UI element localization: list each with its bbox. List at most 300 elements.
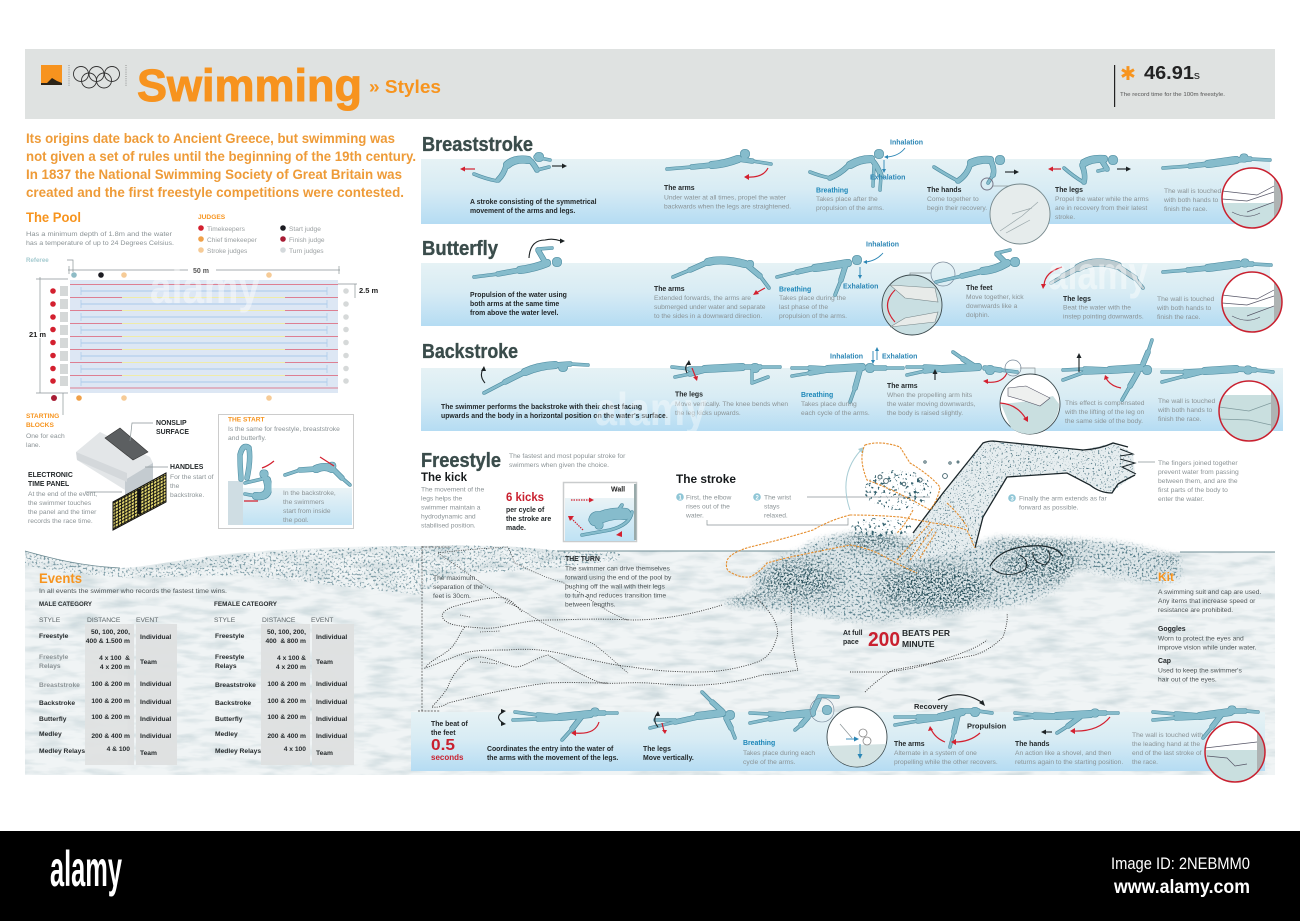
step: breathing: Breathing <box>816 188 848 194</box>
callout: 200 beats per minute: 200 <box>868 629 900 651</box>
text: the turn: pushing off the wall with their legs <box>565 584 666 590</box>
table: female category: EVENT <box>311 617 333 624</box>
table: female category: 400 & 800 m <box>265 638 306 645</box>
text: the turn: THE TURN <box>565 556 600 563</box>
table: female category: 50, 100, 200, <box>267 629 306 636</box>
table: female category: 100 & 200 m <box>267 681 306 688</box>
callout: 200 beats per minute <box>843 628 950 651</box>
label: handles: the <box>170 483 180 490</box>
strip background <box>421 263 1270 326</box>
arrows: overview <box>460 164 567 172</box>
step: breathing: cycle of the arms. <box>743 759 796 766</box>
inset: hand touching wall <box>1222 272 1282 333</box>
step: the legs: The legs <box>1055 187 1083 194</box>
step: breathing: Exhalation <box>882 354 917 360</box>
table: male category: 100 & 200 m <box>91 714 130 721</box>
step: the legs: stroke. <box>1055 214 1075 221</box>
table: male category: 100 & 200 m <box>91 681 130 688</box>
legend: judges: Start judge <box>289 226 321 233</box>
step: the arms: Under water at all times, propel the water <box>664 194 786 202</box>
step: the arms: submerged under water and separate <box>654 304 766 311</box>
step 1 text <box>676 493 732 520</box>
step: the arms: backwards when the legs are straightened. <box>664 203 791 210</box>
text: freestyle intro: The fastest and most popular stroke for <box>509 453 625 460</box>
text: pool description: Has a minimum depth of 1.8m and the water <box>26 231 173 238</box>
text: backstroke start: the swimmers <box>283 499 325 506</box>
table: male category: Freestyle <box>39 633 69 640</box>
step: breathing <box>743 696 838 766</box>
text: starting blocks <box>26 413 65 449</box>
step 2 text: relaxed. <box>764 512 788 520</box>
panel: kit: resistance are prohibited. <box>1158 607 1233 614</box>
text: backstroke start: In the backstroke, <box>283 490 336 497</box>
table: female category: Individual <box>316 733 347 740</box>
text: the kick: hydrodynamic and <box>421 514 476 520</box>
arm <box>910 438 1140 563</box>
text: backstroke start: the pool. <box>283 517 309 524</box>
inset: freestyle finish <box>1205 722 1265 783</box>
text: events intro: In all events the swimmer who records the fastest time wins. <box>39 588 227 595</box>
step: finish: The wall is touched <box>1164 188 1221 195</box>
table: male category: Individual <box>140 716 171 723</box>
step: breathing: Takes place after the <box>816 196 878 203</box>
text: starting blocks: One for each <box>26 433 65 440</box>
step: finish <box>1132 706 1258 766</box>
table: female category: Individual <box>316 634 347 641</box>
step: the legs <box>1048 156 1149 221</box>
step: the hands: begin their recovery. <box>927 205 987 212</box>
diagram: wall turn: Wall <box>611 486 625 494</box>
step: the arms: to the sides in a downward direction. <box>654 313 762 320</box>
text: breaststroke intro: movement of the arms and legs. <box>470 208 575 215</box>
table: male category: MALE CATEGORY <box>39 601 93 608</box>
legend: judges: Finish judge <box>289 237 325 244</box>
step leader lines <box>707 497 930 525</box>
table: female category: FEMALE CATEGORY <box>214 601 278 608</box>
table: male category: Team <box>140 750 157 757</box>
step: finish: with both hands to <box>1163 197 1219 204</box>
step: the hands <box>1015 709 1123 766</box>
step: breathing: Takes place during the <box>779 295 846 302</box>
step: finish: with both hands to <box>1156 305 1212 312</box>
table: male category: Breaststroke <box>39 682 80 689</box>
table: female category: 4 x 200 m <box>276 664 306 671</box>
table: male category: 400 & 1.500 m <box>86 638 130 645</box>
text: the turn: The swimmer can drive themselves <box>565 566 670 572</box>
step: breathing: Breathing <box>779 286 811 294</box>
panel: the pool <box>26 210 379 530</box>
table: male category: Freestyle <box>39 654 69 661</box>
step: the feet: Move together, kick <box>966 294 1024 301</box>
panel: kit: hair out of the eyes. <box>1158 676 1217 684</box>
step: coordination <box>487 708 618 762</box>
table: female category: 100 & 200 m <box>267 698 306 705</box>
pool diagram <box>29 266 379 415</box>
step 1 text: rises out of the <box>686 504 730 510</box>
step: breathing: Inhalation <box>890 140 923 146</box>
step: coordination: Coordinates the entry into the water of <box>487 746 613 753</box>
text: the kick: legs helps the <box>421 496 463 502</box>
label: electronic time panel: records the race time. <box>28 518 93 525</box>
table: female category: STYLE <box>214 617 236 624</box>
table: female category: Individual <box>316 716 347 723</box>
step: breathing: Breathing <box>801 392 833 399</box>
step: leg lift: the same side of the body. <box>1065 418 1143 425</box>
heading: breaststroke: Breaststroke <box>422 134 533 156</box>
label: handles <box>170 464 214 499</box>
callout: 200 beats per minute: At full <box>843 630 863 637</box>
heading: backstroke: Backstroke <box>422 341 518 363</box>
step: breathing: last phase of the <box>779 304 828 311</box>
table: male category: 50, 100, 200, <box>91 629 130 636</box>
table: male category: 200 & 400 m <box>91 733 130 740</box>
step: the arms: the water moving downwards, <box>887 401 976 408</box>
panel: the start <box>218 414 354 528</box>
step: breathing: Takes place during each <box>743 750 815 757</box>
intro paragraph: created and the first freestyle competitions were contested. <box>26 184 404 200</box>
step: the legs: The legs <box>675 392 703 398</box>
text: the turn: forward using the end of the pool by <box>565 574 672 582</box>
text: step 3: forward as possible. <box>1019 504 1079 512</box>
strip background <box>421 368 1283 431</box>
timekeeper dots <box>50 288 56 384</box>
table: male category: Team <box>140 659 157 666</box>
callout: 200 beats per minute: BEATS PER <box>902 628 950 638</box>
text: freestyle intro: swimmers when given the choice. <box>509 462 609 469</box>
step: breathing: propulsion of the arms. <box>816 205 884 212</box>
head <box>990 546 1063 575</box>
website: www.alamy.com <box>1113 877 1250 898</box>
text: pool description <box>26 231 174 247</box>
step: the legs: Move vertically. The knee bends when <box>675 401 788 408</box>
label: handles: backstroke. <box>170 492 204 499</box>
step: breathing <box>810 140 923 212</box>
step: the arms <box>654 260 769 320</box>
watermark <box>150 247 1148 435</box>
step: finish: The wall is touched <box>1158 398 1215 405</box>
label: electronic time panel <box>28 472 97 525</box>
panel: kit: Any items that increase speed or <box>1158 598 1256 605</box>
callout: 6 kicks: 6 kicks <box>506 490 544 504</box>
text: fingers note: first parts of the body to <box>1158 487 1228 494</box>
title: Swimming <box>137 60 362 111</box>
heading: the pool: The Pool <box>26 210 81 225</box>
pool lane blocks <box>60 286 68 386</box>
table: female category: Backstroke <box>215 700 251 707</box>
step 1 text: First, the elbow <box>686 494 731 502</box>
diagram: wall turn <box>564 482 636 542</box>
text: feet separation: separation of the <box>433 584 483 591</box>
table: female category: Team <box>316 750 333 757</box>
legend: judges: Stroke judges <box>207 248 248 255</box>
step: the hands: An action like a shovel, and then <box>1015 750 1111 757</box>
step: finish <box>1156 259 1271 321</box>
strip background <box>421 159 1270 224</box>
step: the legs: Propel the water while the arms <box>1055 196 1149 203</box>
text: step 3 <box>1008 494 1107 512</box>
text: step 3: 3 <box>1010 496 1014 502</box>
step: the legs: The legs <box>643 746 671 753</box>
table: male category: Individual <box>140 699 171 706</box>
step: breathing: Exhalation <box>843 284 878 290</box>
step: finish: the leading hand at the <box>1132 741 1200 748</box>
step: the legs <box>672 360 788 417</box>
callout: beat of the feet: 0.5 <box>431 737 455 754</box>
table: female category: Freestyle <box>215 633 245 640</box>
step: the legs: are in recovery from their latest <box>1055 205 1147 212</box>
table: male category: Medley <box>39 731 62 738</box>
header bar <box>25 49 1275 119</box>
step: breathing: Inhalation <box>830 354 863 360</box>
panel: kit: Kit <box>1158 570 1174 584</box>
table columns background <box>85 624 354 765</box>
heading: the start: THE START <box>228 416 265 424</box>
step: the legs: the leg kicks upwards. <box>675 410 741 417</box>
watermark: alamy <box>595 383 707 435</box>
step: the legs <box>1041 262 1144 320</box>
step: the legs: Beat the water with the <box>1063 304 1131 312</box>
swimmer: breaststroke overview <box>474 152 550 181</box>
other judge dots <box>51 272 272 401</box>
heading: the kick: The kick <box>421 472 468 484</box>
table: male category: Individual <box>140 733 171 740</box>
watermark: alamy <box>1048 247 1148 299</box>
legend: judges: Timekeepers <box>207 226 246 233</box>
label: electronic time panel: At the end of the event, <box>28 491 97 498</box>
callout: beat of the feet: The beat of <box>431 721 468 728</box>
step: the hands: The hands <box>927 187 962 194</box>
table: female category: Individual <box>316 681 347 688</box>
step: the arms: propelling while the other recovers. <box>894 759 998 766</box>
heading: events: Events <box>39 570 82 586</box>
table: male category: Butterfly <box>39 716 67 723</box>
step: the arms: The arms <box>894 741 925 748</box>
text: backstroke intro: The swimmer performs the backstroke with their chest facing <box>441 404 642 411</box>
step: leg lift <box>1063 340 1152 425</box>
dimension: 21 m: 21 m <box>29 330 46 339</box>
table: female category: Relays <box>215 663 237 670</box>
subtitle: » Styles <box>369 77 441 97</box>
step: breathing: Exhalation <box>870 174 905 182</box>
text: step 3: Finally the arm extends as far <box>1019 496 1107 502</box>
legend: judges: JUDGES <box>198 214 226 221</box>
dimension: 2.5 m: 2.5 m <box>359 286 379 295</box>
label: referee: Referee <box>26 257 49 264</box>
arrow: overview <box>481 366 486 383</box>
dimension: 2.5 m <box>338 284 379 298</box>
table: male category: 4 x 100 & <box>99 655 130 662</box>
table: female category: Medley <box>215 731 238 738</box>
step: the arms <box>894 695 1007 766</box>
text: feet separation: feet is 30cm. <box>433 593 471 600</box>
text: the turn <box>565 556 672 608</box>
illustration: freestyle swimmer <box>418 438 1195 711</box>
legend: judges <box>198 214 325 255</box>
step: finish: The wall is touched with <box>1132 732 1203 739</box>
record time callout: 46.91 s <box>1144 63 1201 83</box>
footer bar <box>0 831 1300 921</box>
step: finish: The wall is touched <box>1157 296 1214 303</box>
text: starting blocks: lane. <box>26 442 41 449</box>
turn judge dots <box>343 288 349 384</box>
magnifier: hand entering water <box>1000 360 1060 434</box>
text: feet separation: The maximum <box>433 575 475 582</box>
swimmer: butterfly overview <box>474 248 562 277</box>
intro paragraph: In 1837 the National Swimming Society of Great Britain was <box>26 166 402 182</box>
legend: judges: Turn judges <box>289 248 324 255</box>
magnifier: hands <box>981 178 1050 244</box>
table: male category: Medley Relays <box>39 748 85 755</box>
step: the legs: Move vertically. <box>643 755 694 762</box>
text: pool description: has a temperature of up to 24 Degrees Celsius. <box>26 240 174 247</box>
label: electronic time panel: ELECTRONIC <box>28 472 73 479</box>
step: finish <box>1157 366 1273 423</box>
step: the arms <box>664 150 791 210</box>
step: the legs: instep pointing downwards. <box>1063 314 1144 320</box>
label: electronic time panel: TIME PANEL <box>28 481 69 488</box>
heading: butterfly: Butterfly <box>422 238 499 260</box>
step: the feet: downwards like a <box>966 303 1018 310</box>
text: breaststroke intro: A stroke consisting of the symmetrical <box>470 199 596 206</box>
table: female category: Team <box>316 659 333 666</box>
dotted legs <box>425 547 1007 707</box>
orange stroke path <box>726 443 975 577</box>
text: the kick: swimmer maintain a <box>421 504 481 512</box>
heading: freestyle: Freestyle <box>421 450 501 472</box>
step: finish: finish the race. <box>1164 206 1208 213</box>
panel: breaststroke <box>421 134 1282 244</box>
text: fingers note <box>1138 460 1239 503</box>
magnifier: feet <box>882 262 955 335</box>
callout: 6 kicks: made. <box>506 525 526 532</box>
text: fingers note: prevent water from passing <box>1158 469 1239 476</box>
step: the arms: When the propelling arm hits <box>887 392 972 399</box>
step: the arms: Alternate in a system of one <box>894 750 977 757</box>
step 2 text <box>753 493 791 520</box>
step: finish <box>1163 154 1270 213</box>
step: the legs <box>643 692 735 762</box>
step 1 text: water. <box>685 512 704 520</box>
table: female category: Freestyle <box>215 654 245 661</box>
step: the arms: The arms <box>664 185 695 192</box>
table: male category: DISTANCE <box>87 617 121 624</box>
callout: 6 kicks <box>506 490 551 532</box>
callout: 200 beats per minute: pace <box>843 639 859 646</box>
step: the hands: Come together to <box>927 196 979 203</box>
table: male category: 4 x 200 m <box>100 664 130 671</box>
step: the hands: The hands <box>1015 741 1050 748</box>
panel: freestyle <box>411 438 1265 783</box>
dimension: 50 m: 50 m <box>193 268 209 275</box>
swimmer diving <box>285 462 350 485</box>
callout: 6 kicks: the stroke are <box>506 516 551 523</box>
panel: kit: Goggles <box>1158 626 1186 633</box>
step: the hands: returns again to the starting position. <box>1015 759 1123 766</box>
step: coordination: the arms with the movement of the legs. <box>487 755 618 762</box>
text: fingers note: enter the water. <box>1158 496 1204 503</box>
table: female category: 100 & 200 m <box>267 714 306 721</box>
panel: kit: Cap <box>1158 658 1171 665</box>
step: breathing <box>792 347 917 417</box>
step: the hands <box>927 156 1019 212</box>
step: breathing: Takes place during <box>801 401 857 408</box>
callout: beat of the feet <box>431 721 468 762</box>
step: finish: end of the last stroke of <box>1132 750 1202 757</box>
table: male category: Individual <box>140 681 171 688</box>
callout: 200 beats per minute: MINUTE <box>902 639 935 649</box>
step: breathing: Inhalation <box>866 242 899 248</box>
callout: beat of the feet: the feet <box>431 730 456 737</box>
panel: backstroke <box>421 340 1283 441</box>
table: female category: 4 x 100 <box>284 746 306 753</box>
panel: butterfly <box>421 238 1282 335</box>
text: starting blocks: BLOCKS <box>26 422 54 429</box>
heading: the stroke: The stroke <box>676 474 736 486</box>
table: female category: Butterfly <box>215 716 243 723</box>
panel: kit: A swimming suit and cap are used. <box>1158 589 1261 596</box>
callout: 6 kicks: per cycle of <box>506 507 545 514</box>
step: the feet <box>936 250 1024 319</box>
step: the feet: The feet <box>966 285 993 292</box>
label: handles: HANDLES <box>170 464 204 471</box>
intro paragraph: not given a set of rules until the beginning of the 19th century. <box>26 148 416 164</box>
text: the kick: stabilised position. <box>421 522 476 530</box>
arrow: overview <box>529 238 565 258</box>
text: fingers note: between them, and are the <box>1158 478 1238 485</box>
panel: kit: improve vision while under water. <box>1158 644 1257 652</box>
text: backstroke intro: upwards and the body in a horizontal position on the water's surface. <box>441 413 668 420</box>
table: female category <box>214 601 347 757</box>
swimmer: backstroke overview <box>484 362 588 393</box>
step: finish: the race. <box>1132 759 1158 766</box>
icon: olympic rings <box>69 65 126 88</box>
step: finish: finish the race. <box>1157 314 1201 321</box>
table: male category: 4 & 100 <box>107 746 130 753</box>
text: the kick: The movement of the <box>421 486 484 494</box>
text: butterfly intro: both arms at the same time <box>470 301 559 308</box>
step 1 text: 1 <box>678 496 682 502</box>
step 2 text: 2 <box>756 496 760 502</box>
step: finish: finish the race. <box>1158 416 1202 423</box>
panel: kit: Worn to protect the eyes and <box>1158 636 1244 642</box>
dimension: 50 m <box>68 266 340 275</box>
step: the legs: The legs <box>1063 296 1091 303</box>
label: electronic time panel: the swimmer touches <box>28 500 92 507</box>
text: the turn: to turn and reduces transition time <box>565 592 666 600</box>
water background <box>25 540 1275 776</box>
intro paragraph <box>26 130 416 200</box>
inset: hand touching wall <box>1222 168 1282 229</box>
strip background: freestyle <box>411 712 1265 771</box>
step: the arms: Extended forwards, the arms are <box>654 295 751 302</box>
record time callout: ✱ <box>1120 63 1136 85</box>
text: backstroke start: start from inside <box>283 508 331 515</box>
text: the start: and butterfly. <box>228 435 266 442</box>
dimension: 21 m <box>29 277 68 393</box>
step: the arms: the body is raised slightly. <box>887 410 963 417</box>
step: breathing: Breathing <box>743 740 775 747</box>
intro paragraph: Its origins date back to Ancient Greece, but swimming was <box>26 130 395 146</box>
table: male category: Backstroke <box>39 700 75 707</box>
table: male category: Relays <box>39 663 61 670</box>
panel: kit <box>1158 570 1261 684</box>
callout: beat of the feet: seconds <box>431 753 464 762</box>
label: nonslip surface: SURFACE <box>156 429 189 436</box>
table: male category <box>39 601 171 757</box>
text: butterfly intro: from above the water level. <box>470 310 559 317</box>
text: butterfly intro: Propulsion of the water using <box>470 292 567 299</box>
table: female category: DISTANCE <box>262 617 296 624</box>
